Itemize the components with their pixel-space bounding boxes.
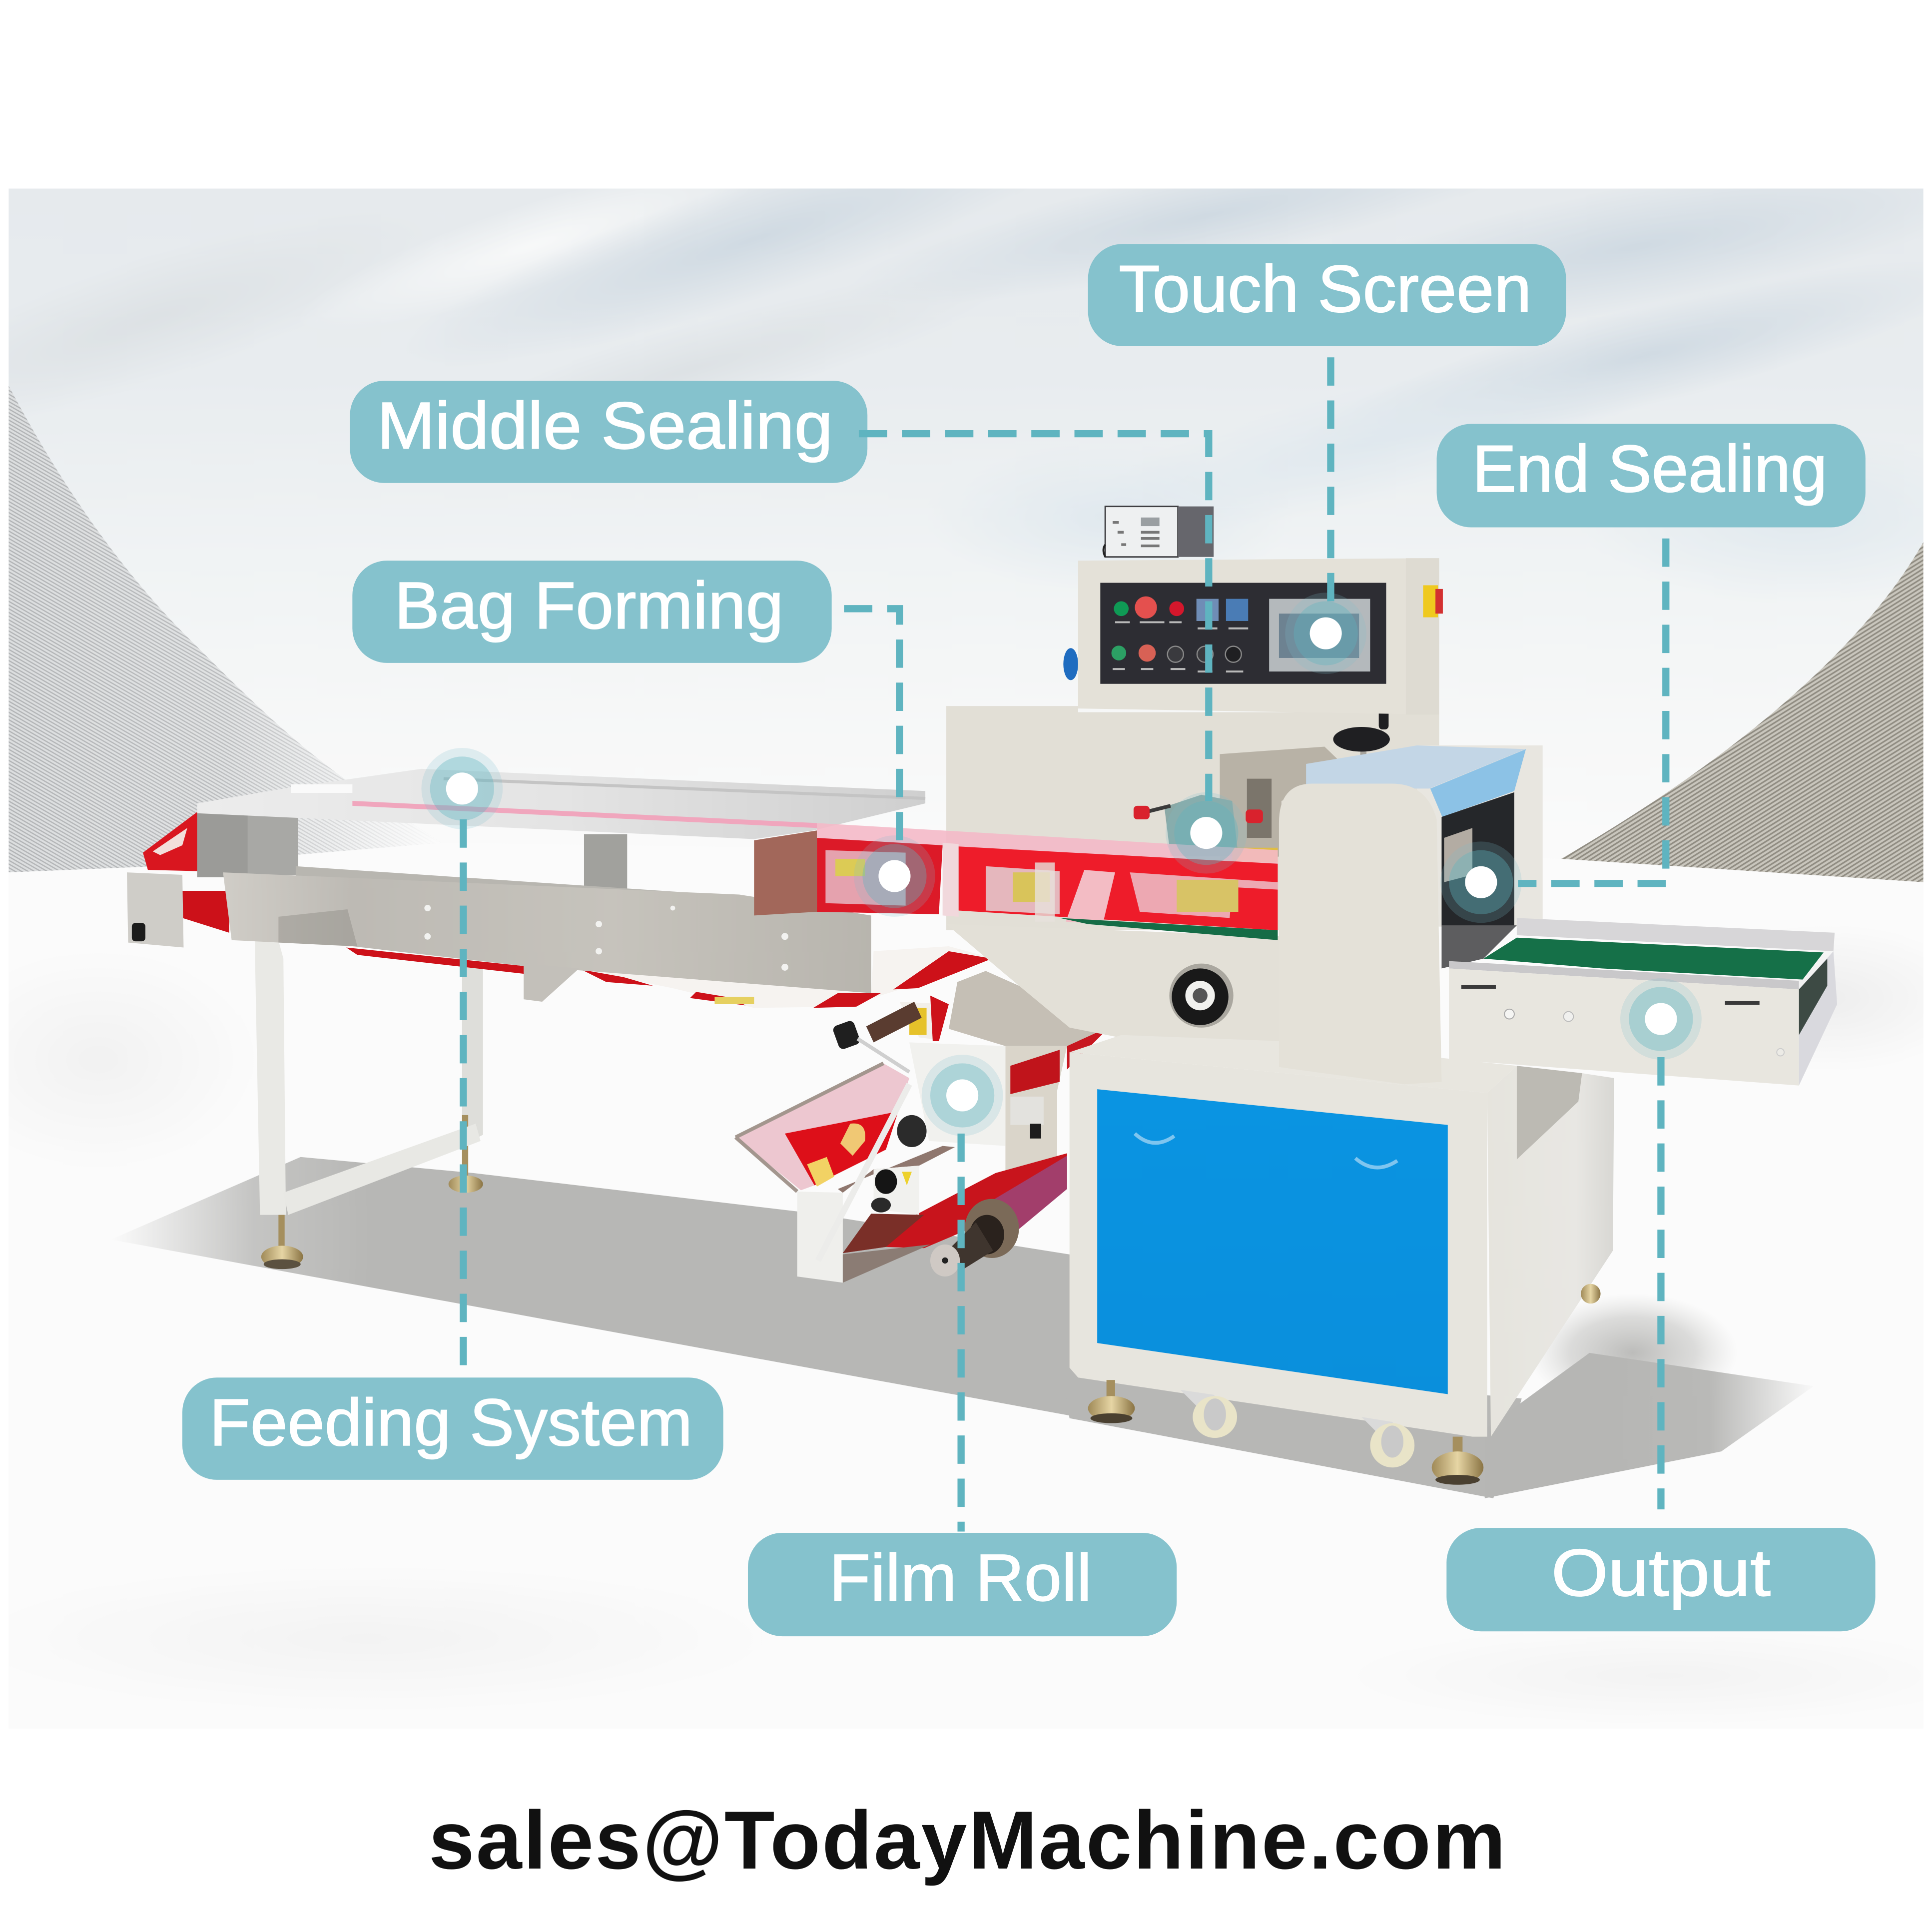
hotspot: touch screen bbox=[1285, 593, 1366, 674]
label: Feeding System: Feeding System bbox=[209, 1385, 692, 1460]
film roll assembly bbox=[735, 971, 1110, 1283]
packaged products on belt bbox=[754, 823, 1278, 940]
hand wheel on body bbox=[1169, 964, 1234, 1028]
machine feet and casters bbox=[1088, 1284, 1601, 1485]
label: Feeding System bbox=[182, 1377, 723, 1480]
label: Touch Screen: Touch Screen bbox=[1119, 252, 1531, 326]
connector: Output bbox=[1660, 1057, 1662, 1509]
label: Middle Sealing: Middle Sealing bbox=[377, 389, 833, 463]
yellow emergency switch bbox=[1423, 585, 1443, 618]
forming belt bbox=[1060, 918, 1278, 940]
hotspot: bag forming bbox=[854, 835, 935, 917]
machine main body bbox=[946, 697, 1439, 1070]
hotspot: film roll bbox=[922, 1055, 1003, 1136]
connector: Touch Screen bbox=[1329, 357, 1332, 602]
cabinet base bbox=[1070, 1035, 1614, 1437]
label: Output bbox=[1446, 1528, 1876, 1631]
blue door bbox=[1097, 1089, 1448, 1394]
label: Bag Forming: Bag Forming bbox=[394, 569, 784, 643]
control buttons bbox=[1112, 597, 1248, 671]
left conveyor legs bbox=[255, 907, 483, 1269]
handwheel bbox=[1333, 697, 1390, 784]
label: Touch Screen bbox=[1088, 244, 1566, 346]
left conveyor: film under rail bbox=[346, 946, 994, 1008]
label: Bag Forming bbox=[352, 561, 832, 663]
controller on top bbox=[1103, 507, 1214, 557]
label: Middle Sealing bbox=[350, 381, 867, 483]
hotspot: end sealing bbox=[1440, 841, 1522, 923]
connector: Film Roll bbox=[960, 1134, 963, 1531]
connector: Feeding System bbox=[462, 819, 465, 1370]
machine column and exit tunnel bbox=[1279, 745, 1543, 1084]
label: Film Roll bbox=[748, 1533, 1177, 1636]
left mountain bbox=[8, 386, 441, 872]
label: Output: Output bbox=[1551, 1536, 1771, 1610]
hotspot: output bbox=[1620, 978, 1702, 1060]
right mountain bbox=[1561, 542, 1924, 882]
sealing mechanism bbox=[1134, 747, 1355, 862]
floor shadow bbox=[111, 1157, 1814, 1498]
ground floor bbox=[0, 843, 1932, 1729]
connector: End Sealing bbox=[1518, 539, 1666, 883]
blue switch on side of control box bbox=[1063, 648, 1078, 680]
output conveyor bbox=[1441, 918, 1837, 1086]
control box bbox=[1078, 558, 1443, 714]
label: End Sealing: End Sealing bbox=[1472, 432, 1827, 506]
touch screen device bbox=[1269, 599, 1370, 671]
label: End Sealing bbox=[1437, 424, 1866, 528]
connector: Middle Sealing bbox=[859, 434, 1209, 801]
hotspot: middle sealing bbox=[1166, 792, 1247, 874]
connector: Bag Forming bbox=[844, 609, 899, 850]
hotspot: feeding system bbox=[421, 748, 503, 829]
contact email: sales@TodayMachine.com bbox=[429, 1794, 1507, 1886]
label: Film Roll: Film Roll bbox=[829, 1541, 1092, 1615]
left conveyor frame bbox=[127, 769, 925, 1002]
